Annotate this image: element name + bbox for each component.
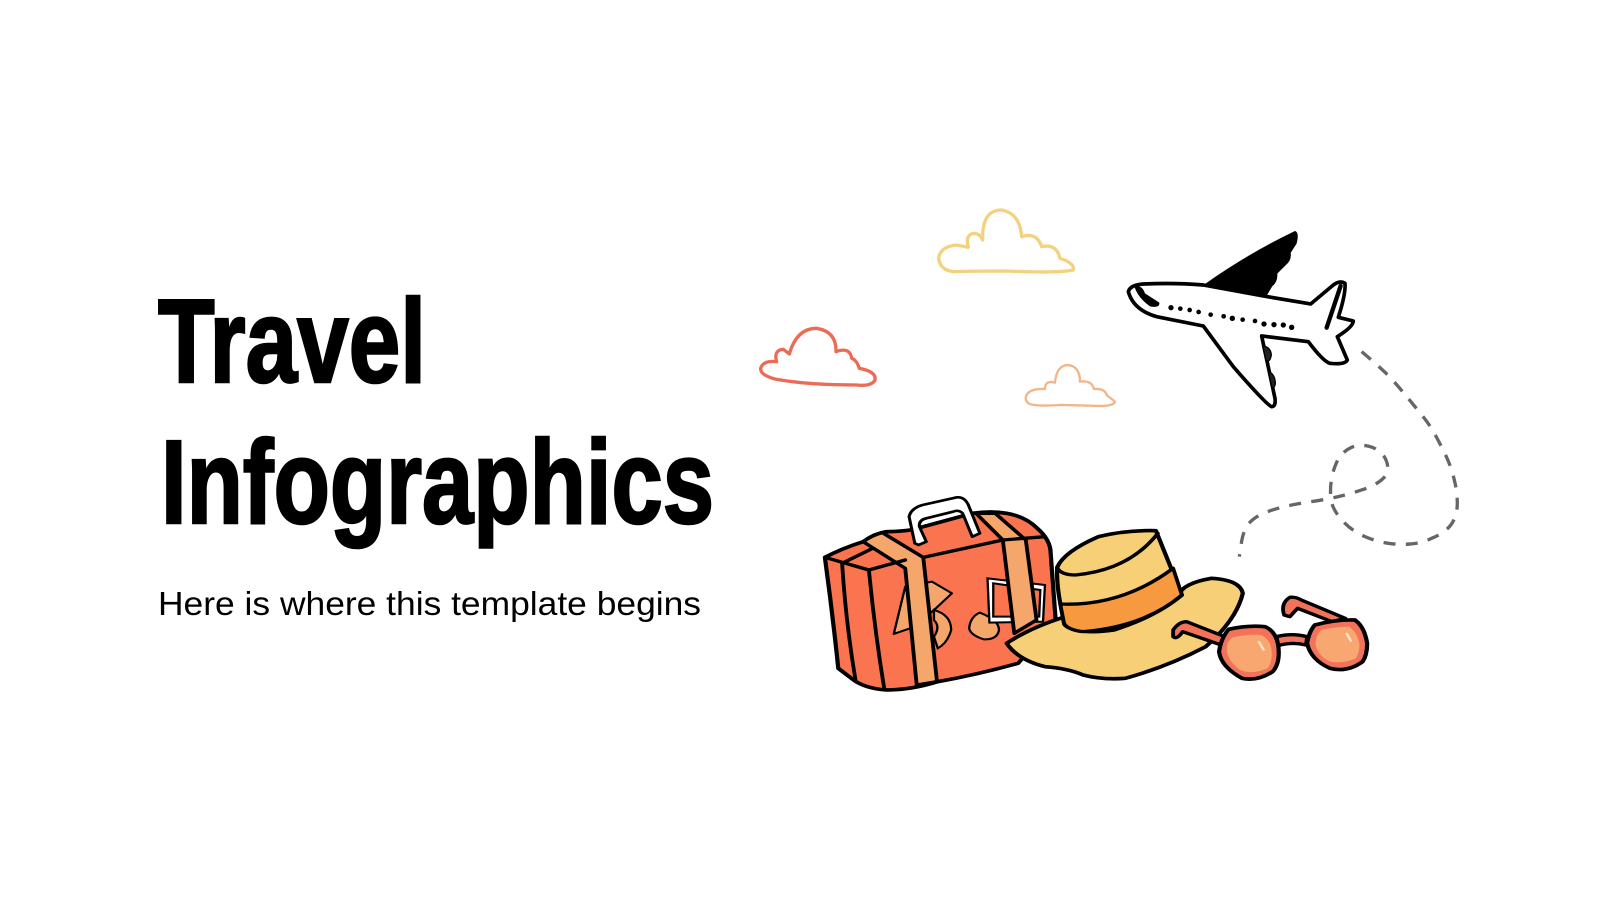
bridge (1276, 635, 1307, 646)
buckle (988, 578, 1045, 623)
hat band (1060, 568, 1182, 632)
travel items (825, 497, 1367, 690)
dashed flight path (1239, 352, 1457, 557)
icon: orange cloud (1026, 365, 1115, 406)
crown top (1057, 533, 1158, 575)
sticker: blob (969, 613, 999, 639)
sticker: ring (934, 610, 951, 648)
icon: straw hat (1007, 531, 1243, 679)
engines (1263, 346, 1275, 388)
suitcase edges (825, 537, 1045, 688)
title: Infographics (161, 416, 714, 549)
flight path and airplane (1128, 232, 1457, 557)
brim (1007, 578, 1243, 679)
strap right (976, 513, 1037, 633)
icon: sunglasses (1173, 597, 1367, 679)
left lens (1219, 626, 1279, 679)
handle (909, 497, 980, 545)
title: Travel (158, 275, 426, 408)
right lens (1307, 620, 1367, 670)
subtitle: Here is where this template begins (158, 586, 701, 623)
icon: suitcase (825, 497, 1056, 690)
title (158, 275, 714, 549)
strap left (863, 533, 937, 685)
icon: airplane (1128, 232, 1353, 407)
sticker: triangle (894, 582, 952, 634)
icon: red cloud (761, 328, 875, 385)
cockpit window (1134, 286, 1159, 307)
tail stripe (1327, 286, 1341, 328)
icon: yellow cloud (939, 210, 1073, 272)
crown (1057, 531, 1182, 632)
suitcase body (825, 512, 1056, 690)
right arm (1283, 597, 1345, 622)
clouds (761, 210, 1115, 406)
far wing (1203, 232, 1297, 297)
passenger windows (1168, 305, 1294, 330)
left arm (1173, 622, 1225, 645)
fuselage (1128, 282, 1353, 407)
